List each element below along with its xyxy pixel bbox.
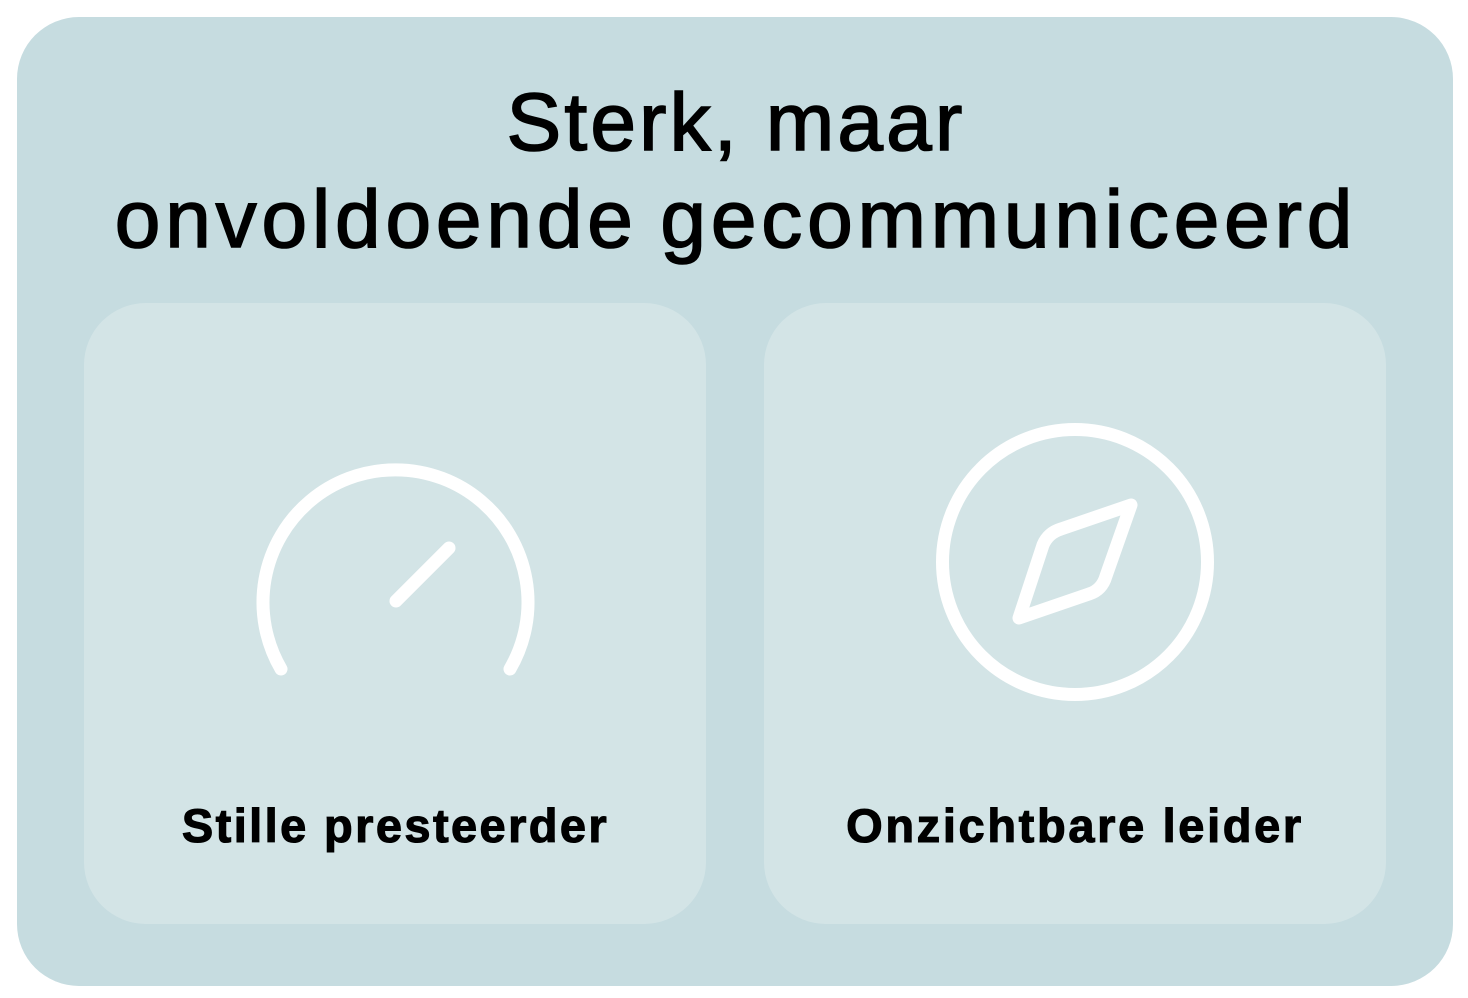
panel: stille presteerder — [84, 303, 706, 924]
panel: onzichtbare leider — [764, 303, 1386, 924]
title: Sterk, maar — [506, 77, 965, 168]
label: stille presteerder: Stille presteerder — [182, 799, 609, 852]
title — [115, 77, 1357, 265]
label: onzichtbare leider: Onzichtbare leider — [846, 799, 1304, 852]
title: onvoldoende gecommuniceerd — [115, 174, 1357, 265]
